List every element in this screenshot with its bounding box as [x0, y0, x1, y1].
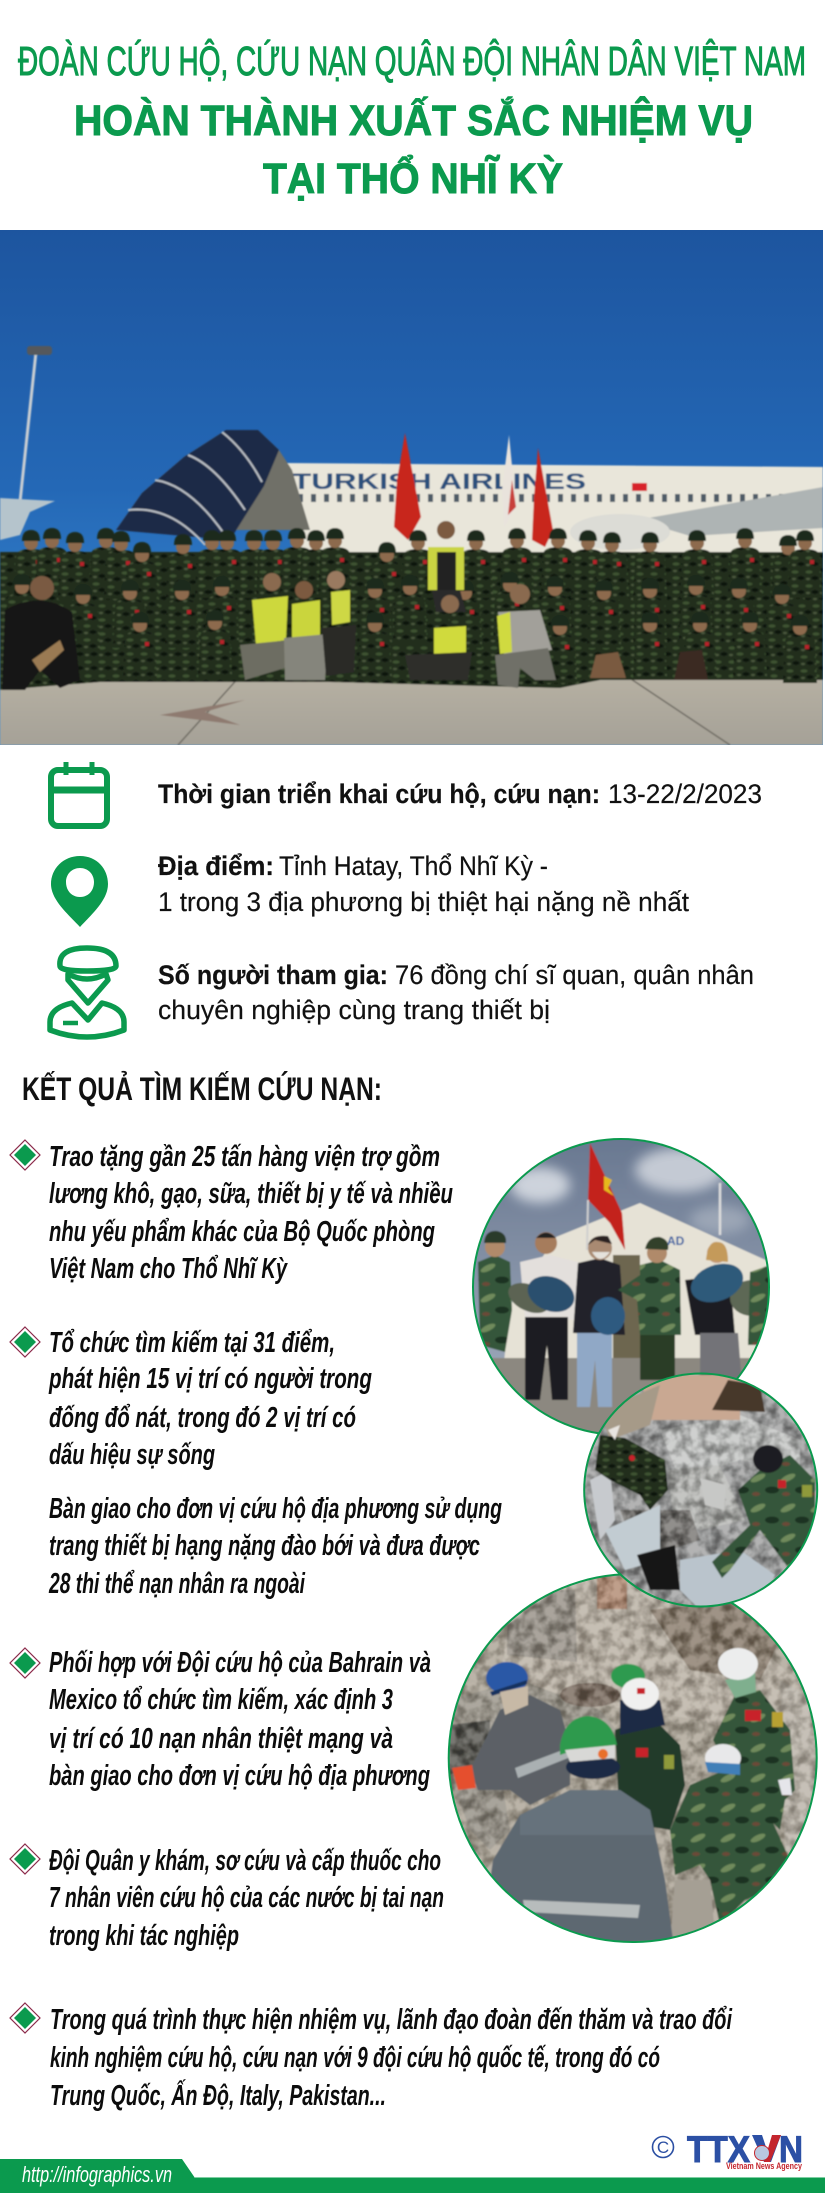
ground	[0, 672, 823, 745]
medical text: Đội Quân y khám, sơ cứu và cấp thuốc cho	[49, 1845, 441, 1877]
coordination text: vị trí có 10 nạn nhân thiệt mạng và	[49, 1723, 393, 1755]
light pole	[17, 346, 52, 530]
backpacks	[590, 650, 708, 680]
info: location	[158, 851, 689, 917]
tail flag	[632, 483, 647, 491]
diamond	[10, 1327, 40, 1357]
medical text	[49, 1845, 444, 1952]
diamond	[10, 1648, 40, 1678]
text: handover: trang thiết bị hạng nặng đào bới và đưa được	[49, 1530, 480, 1562]
bullet: coordination	[10, 1647, 431, 1792]
front row soldiers	[5, 572, 817, 683]
photo circle: rescue workers in rubble	[440, 1570, 825, 1950]
icon: calendar	[51, 762, 107, 826]
heading: results: KẾT QUẢ TÌM KIẾM CỨU NẠN:	[22, 1071, 382, 1107]
aid text: Việt Nam cho Thổ Nhĩ Kỳ	[49, 1253, 288, 1285]
photo circle: aid handover	[472, 1138, 770, 1434]
exchange text: Trung Quốc, Ấn Độ, Italy, Pakistan...	[50, 2078, 386, 2112]
icon: soldier	[50, 948, 124, 1037]
agency name: Vietnam News Agency	[726, 2161, 802, 2171]
photo circle: aid handover: AD	[667, 1234, 685, 1248]
bullet: medical	[10, 1844, 444, 1952]
right soldier	[747, 1266, 768, 1346]
crouching soldier	[670, 1770, 790, 1925]
info: participants	[158, 960, 754, 1025]
coordination text: bàn giao cho đơn vị cứu hộ địa phương	[49, 1760, 430, 1792]
coordination text	[49, 1647, 431, 1792]
back row soldiers	[14, 528, 822, 610]
logo: TTXVN	[652, 2129, 803, 2171]
icon: location pin	[51, 856, 108, 927]
info: location: Địa điểm:	[158, 851, 274, 881]
civilians in yellow vests	[240, 521, 556, 688]
bullet: exchange	[10, 2003, 733, 2112]
left soldier	[478, 1255, 512, 1352]
exchange text	[50, 2004, 733, 2112]
info: time: Thời gian triển khai cứu hộ, cứu nạn:	[158, 779, 600, 809]
aid text	[49, 1141, 453, 1285]
text: handover: 28 thi thể nạn nhân ra ngoài	[48, 1568, 306, 1600]
title	[18, 38, 806, 203]
info: location: 1 trong 3 địa phương bị thiệt hại nặng nề nhất	[158, 887, 689, 917]
aid text: Trao tặng gần 25 tấn hàng viện trợ gồm	[49, 1141, 440, 1173]
search text: dấu hiệu sự sống	[49, 1439, 215, 1471]
search text: đống đổ nát, trong đó 2 vị trí có	[49, 1402, 356, 1434]
soldier in centre	[618, 1260, 681, 1335]
diamond	[10, 1844, 40, 1874]
photo circle: soldiers searching debris	[580, 1370, 820, 1610]
photo: team at the airport	[0, 230, 823, 745]
terminal	[0, 498, 55, 540]
footer band	[0, 2159, 825, 2193]
footer URL: http://infographics.vn	[22, 2162, 172, 2187]
info: participants: 76 đồng chí sĩ quan, quân nhân	[395, 960, 754, 990]
man in white	[519, 1256, 543, 1284]
cabin windows	[298, 494, 823, 502]
info: time: 13-22/2/2023	[608, 779, 762, 809]
coordination text: Phối hợp với Đội cứu hộ của Bahrain và	[49, 1647, 431, 1679]
soldier right	[712, 1455, 815, 1578]
info: participants: Số người tham gia:	[158, 960, 388, 990]
crowd base	[0, 552, 823, 690]
copyright symbol	[652, 2136, 674, 2158]
coordination text: Mexico tổ chức tìm kiếm, xác định 3	[49, 1684, 393, 1716]
flag	[588, 1143, 625, 1250]
title line 2: HOÀN THÀNH XUẤT SẮC NHIỆM VỤ	[74, 96, 753, 145]
wordmark: N	[779, 2129, 803, 2170]
medical text: 7 nhân viên cứu hộ của các nước bị tai nạn	[49, 1882, 444, 1914]
search text: phát hiện 15 vị trí có người trong	[48, 1363, 372, 1395]
aid text: lương khô, gạo, sữa, thiết bị y tế và nhiều	[49, 1178, 453, 1210]
text: handover: Bàn giao cho đơn vị cứu hộ địa phương sử dụng	[49, 1493, 502, 1525]
wing	[637, 487, 823, 536]
flags	[394, 433, 553, 547]
centre soldier	[615, 1715, 685, 1830]
tent	[504, 1202, 766, 1359]
diamond	[10, 1140, 40, 1170]
standing soldier	[713, 1690, 795, 1830]
man in black jacket	[573, 1258, 625, 1335]
woman	[685, 1275, 735, 1335]
copyright symbol: C	[657, 2138, 669, 2157]
man in black	[2, 576, 80, 690]
wordmark: TTX	[687, 2129, 750, 2170]
title line 3: TẠI THỔ NHĨ KỲ	[263, 153, 563, 203]
worker with vest	[470, 1695, 570, 1805]
diamond	[10, 2003, 40, 2033]
worker from behind	[490, 1816, 673, 1941]
jet bridge	[116, 430, 310, 545]
bullet: search	[10, 1327, 372, 1471]
rubble texture	[450, 1576, 816, 1924]
info: participants: chuyên nghiệp cùng trang thiết bị	[158, 995, 550, 1025]
aid text: nhu yếu phẩm khác của Bộ Quốc phòng	[49, 1216, 435, 1248]
search text	[48, 1327, 372, 1471]
airline name: TURKISH AIRLINES	[292, 469, 586, 494]
medical text: trong khi tác nghiệp	[49, 1920, 239, 1952]
bullet: aid	[10, 1140, 453, 1285]
info: location: Tỉnh Hatay, Thổ Nhĩ Kỳ -	[279, 851, 548, 881]
text: handover	[48, 1493, 502, 1600]
search text: Tổ chức tìm kiếm tại 31 điểm,	[49, 1327, 335, 1359]
rubble texture	[580, 1370, 820, 1610]
soldier left	[595, 1435, 668, 1510]
aircraft fuselage	[284, 463, 823, 560]
wordmark	[687, 2129, 803, 2170]
